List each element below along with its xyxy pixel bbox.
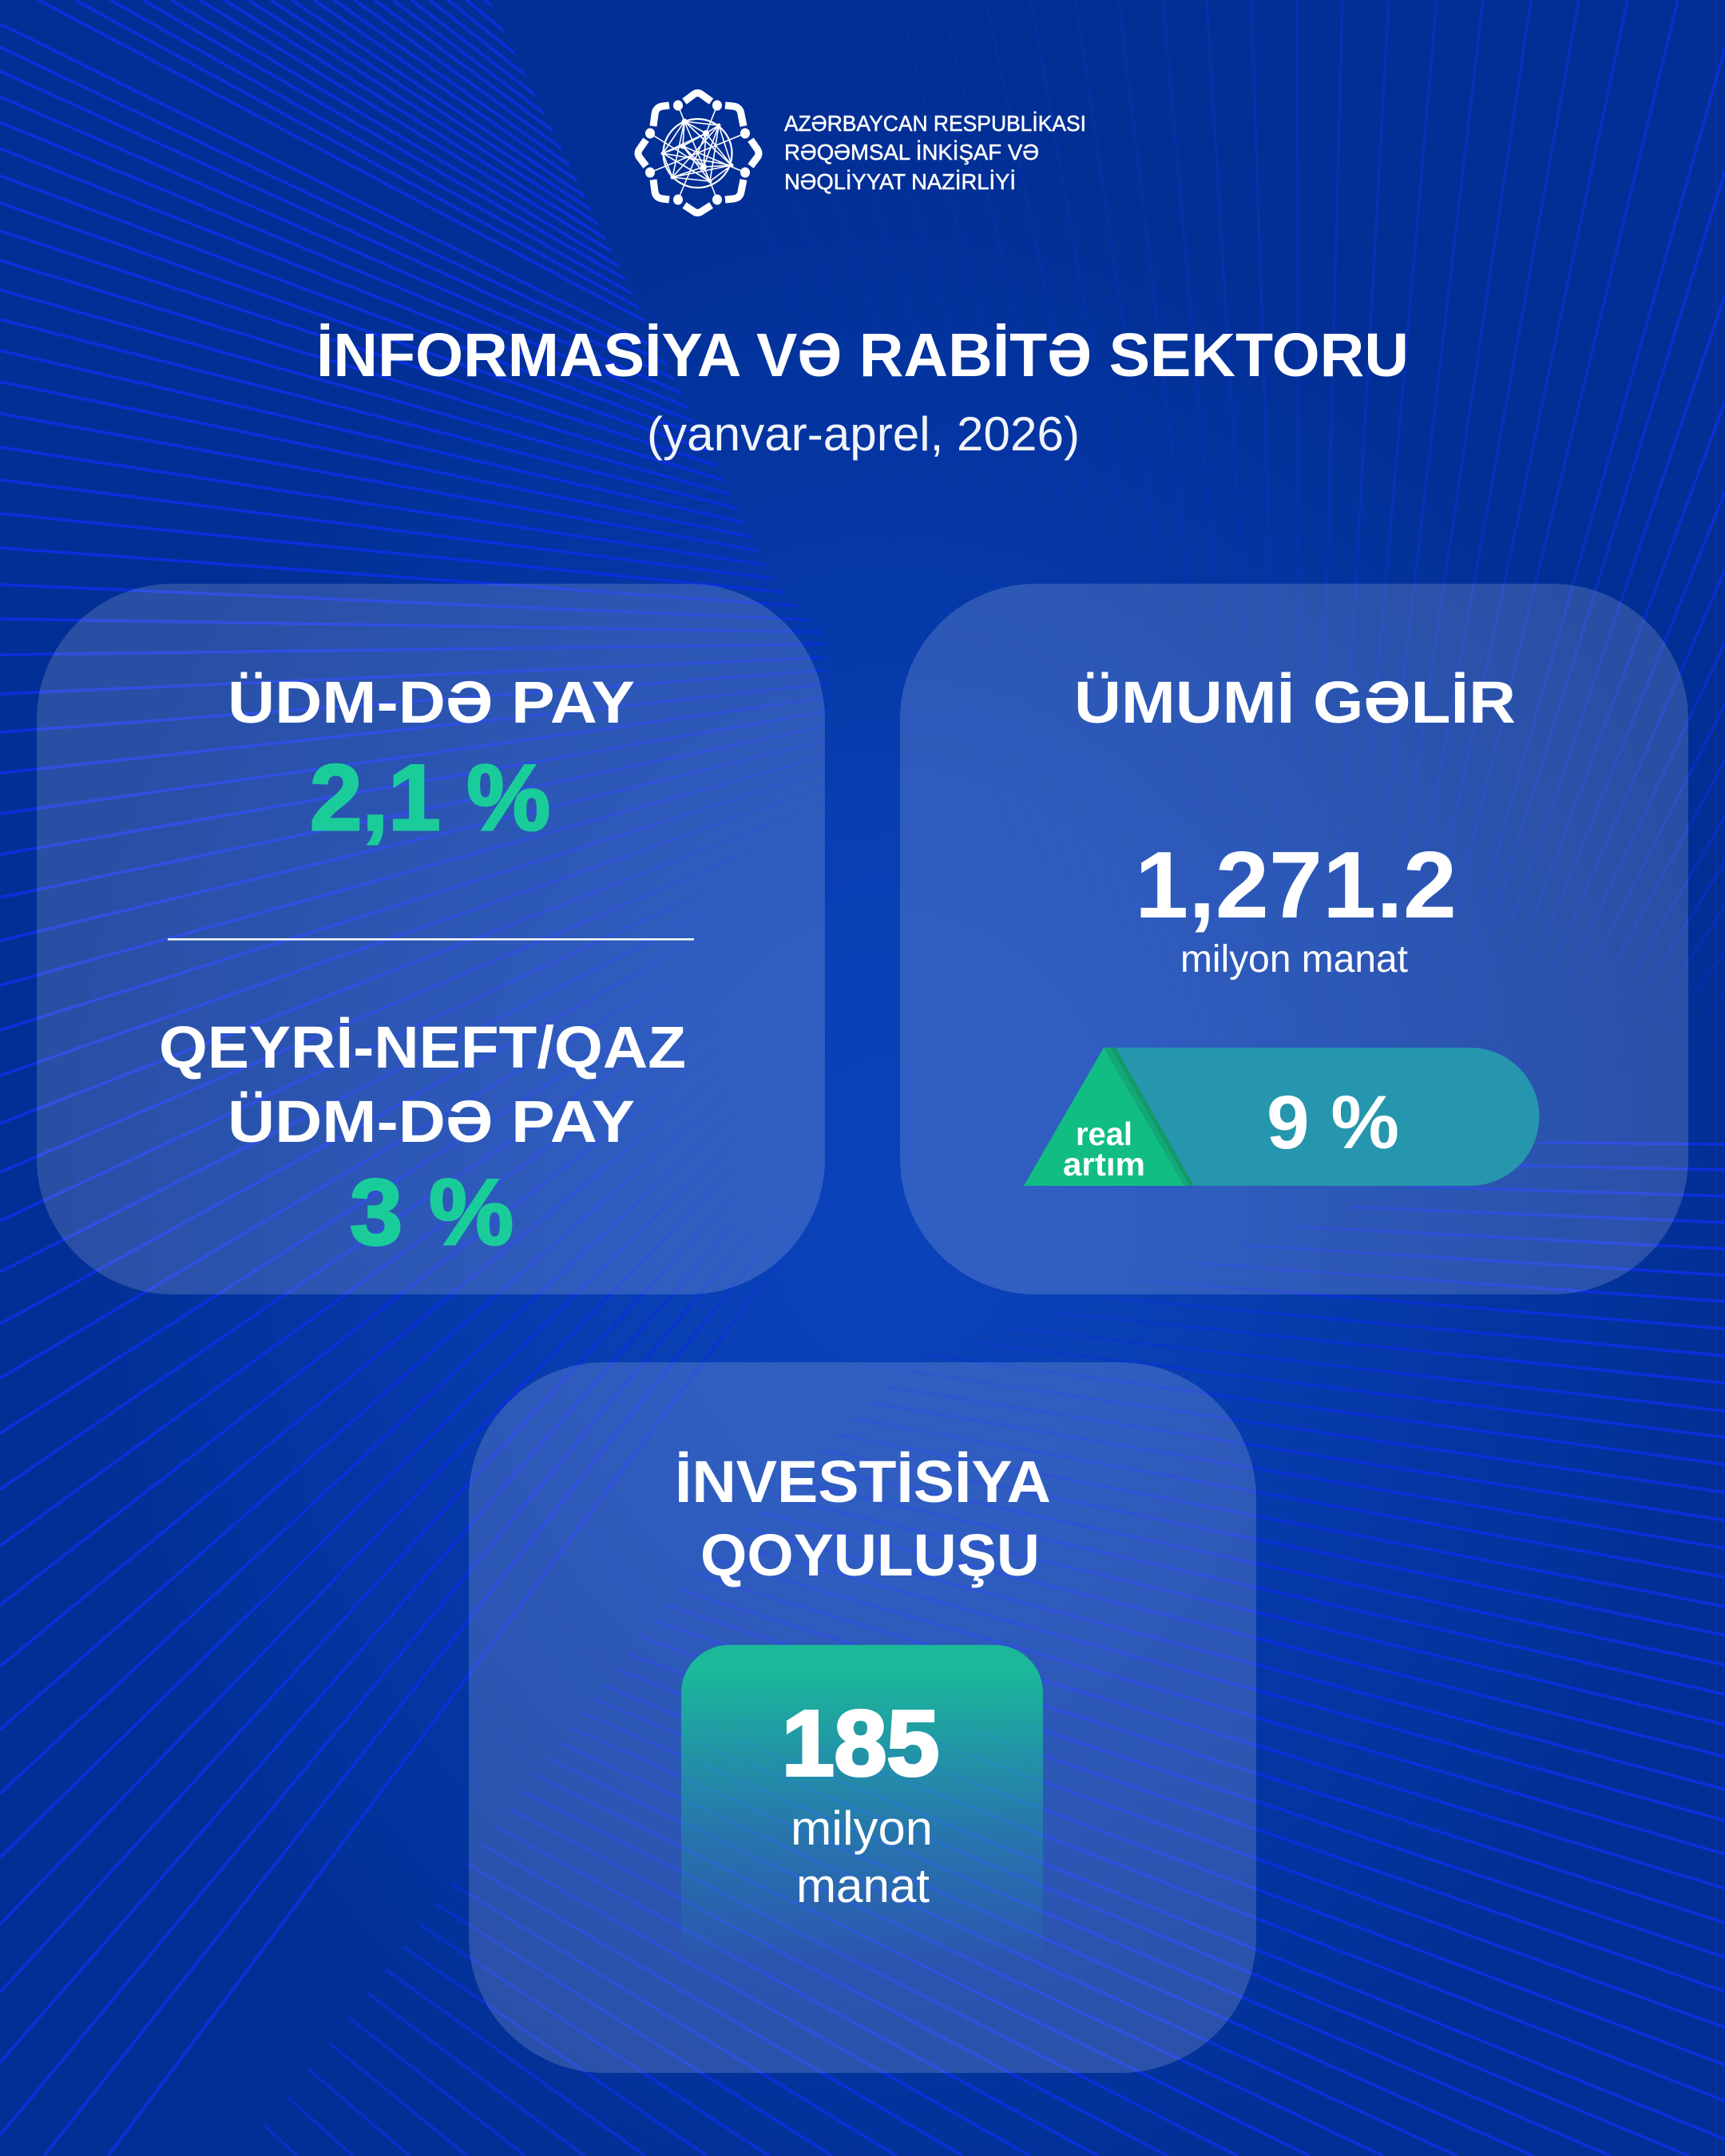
heading: non-oil GDP share: QEYRİ-NEFT/QAZ	[159, 1014, 686, 1080]
unit: million manat: manat	[796, 1859, 930, 1912]
label: real growth: artım	[1063, 1146, 1145, 1183]
label: real growth: real	[1076, 1116, 1132, 1152]
icon: green triangle	[1024, 1048, 1194, 1186]
heading: GDP share: ÜDM-DƏ PAY	[228, 669, 635, 735]
heading: non-oil GDP share: ÜDM-DƏ PAY	[228, 1088, 635, 1155]
title: İNFORMASİYA VƏ RABİTƏ SEKTORU	[316, 321, 1409, 390]
heading: non-oil GDP share	[159, 1014, 686, 1155]
value: growth 9 %: 9 %	[1267, 1080, 1399, 1165]
ministry name text: RƏQƏMSAL İNKİŞAF VƏ	[784, 140, 1039, 164]
unit: million manat	[791, 1801, 933, 1912]
label: real growth	[1063, 1116, 1145, 1183]
ministry name text: NƏQLİYYAT NAZİRLİYİ	[784, 169, 1016, 194]
value: non-oil GDP share 3 %: 3 %	[350, 1159, 514, 1264]
panel: total revenue	[900, 584, 1688, 1294]
card: investment value	[681, 1645, 1043, 1967]
callout: real growth	[1024, 1048, 1540, 1186]
header: ministry logo and name	[638, 93, 1086, 212]
heading: investment: QOYULUŞU	[700, 1522, 1040, 1588]
heading: investment	[675, 1449, 1051, 1588]
panel: investment	[469, 1362, 1256, 2073]
unit: million manat: milyon manat	[1180, 938, 1408, 981]
unit: million manat: milyon	[791, 1801, 933, 1855]
panel: GDP share	[37, 584, 825, 1294]
background line pattern: left fan	[0, 0, 827, 2156]
ministry name text: AZƏRBAYCAN RESPUBLİKASI	[784, 111, 1086, 136]
background line pattern: top right fan	[818, 0, 1725, 1035]
value: GDP share 2,1 %: 2,1 %	[310, 745, 550, 850]
background line pattern: lower right fan	[242, 1140, 1725, 2156]
value: revenue amount: 1,271.2	[1135, 832, 1457, 938]
value: 185: 185	[782, 1691, 939, 1795]
icon: ministry emblem	[638, 93, 759, 212]
heading: investment: İNVESTİSİYA	[675, 1449, 1051, 1515]
ministry name text	[784, 111, 1086, 194]
subtitle: period: (yanvar-aprel, 2026)	[647, 407, 1080, 461]
heading: total revenue: ÜMUMİ GƏLİR	[1074, 669, 1516, 735]
